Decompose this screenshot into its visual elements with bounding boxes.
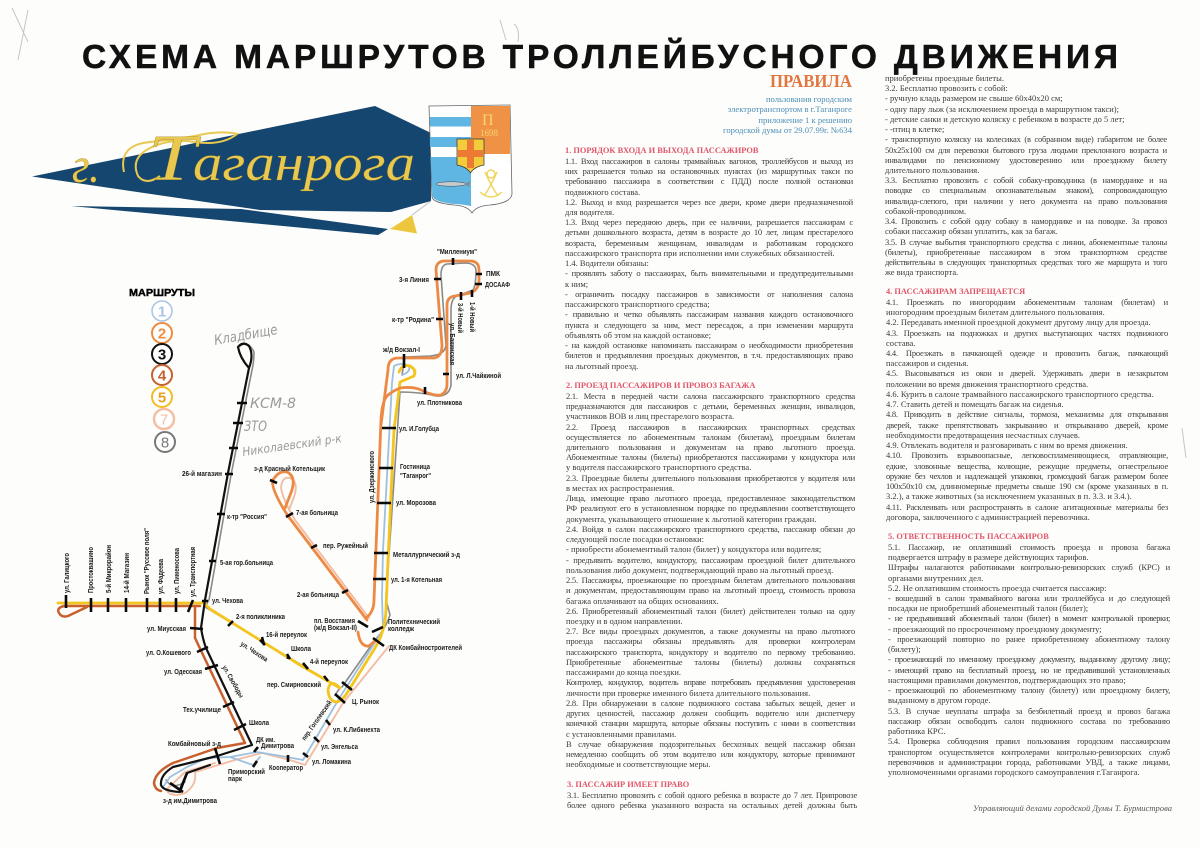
handwritten notes: КСМ-8 — [250, 396, 296, 412]
section 2: passenger travel and baggage: необходимые и соответствующие меры. — [566, 759, 711, 769]
stop labels: Ц. Рынок — [352, 699, 379, 706]
section 5: passenger liability: (билету); — [888, 644, 921, 654]
title: СХЕМА МАРШРУТОВ ТРОЛЛЕЙБУСНОГО ДВИЖЕНИЯ — [82, 37, 1118, 76]
section 4: prohibitions: договора, заключенного с администрацией перевозчика. — [886, 512, 1090, 522]
section 5: passenger liability: 5.2. Не оплатившим стоимость проезда считается пассажир: — [888, 583, 1107, 593]
subtitle: rules source: приложение 1 к решению — [758, 115, 852, 125]
section 5: passenger liability: - проезжающий по просроченному проездному документу; — [888, 624, 1102, 634]
stop labels: ул. Энгельса — [321, 744, 358, 751]
legend: route numbers: 4 — [158, 368, 167, 384]
section 5: passenger liability: работника КРС. — [888, 726, 946, 736]
section 2: passenger travel and baggage: 2.3. Проездные билеты длительного пользования приобретаются у водителя или — [566, 473, 855, 483]
section 3 continued: passenger rights: собакой-проводником. — [885, 206, 966, 216]
stop labels: Тех.училище — [183, 707, 221, 714]
stop labels: ул. Пименосова — [174, 548, 181, 594]
section 3 start: passenger rights — [567, 780, 857, 810]
section 3 continued: passenger rights: собаки пассажир обязан уплатить, как за багаж. — [885, 226, 1058, 236]
stop labels: 1-й Новый — [468, 302, 476, 332]
stop labels: ул. Бакинская — [448, 323, 455, 365]
stop labels: к-тр "Родина" — [392, 317, 434, 324]
section 3 continued: passenger rights: 3.2. Бесплатно провозить с собой: — [885, 83, 1008, 93]
section 2: passenger travel and baggage: и документам, предоставляющим право на льготный проезд, стоимость провоза — [566, 585, 855, 595]
stop labels: ул. Морозова — [396, 500, 436, 507]
section 1: entry and exit: них разрешается только на остановочных пунктах (из маршрутных такси по — [565, 166, 853, 176]
section 2: passenger travel and baggage: документа, указывающего отношение к льготной категории граждан. — [566, 514, 816, 524]
section 2: passenger travel and baggage: Приобретенные абонементные талоны (билеты) должны сохраняться — [566, 657, 855, 667]
section 5: passenger liability: - проезжающий по именному проездному документу, выданному другому лицу; — [888, 654, 1170, 664]
section 2: passenger travel and baggage: 2.5. Пассажиры, проезжающие по проездным билетам длительного пользования — [566, 575, 855, 585]
section 1: entry and exit: - проявлять заботу о пассажирах, быть внимательными и предупредительными — [565, 268, 853, 278]
section 1: entry and exit — [565, 146, 853, 371]
stop labels: Школа — [291, 646, 311, 653]
icon: city coat of arms — [429, 105, 512, 213]
section 1: entry and exit: возраста, беременным женщинам, инвалидам и работникам городского — [565, 238, 853, 248]
section 1: entry and exit: 1.1. Вход пассажиров в салоны трамвайных вагонов, троллейбусов и выход из — [565, 156, 853, 166]
stop labels: ул. Галицкого — [64, 553, 71, 593]
stop labels: Простоквашино — [88, 547, 95, 593]
section 1: entry and exit: 1. ПОРЯДОК ВХОДА И ВЫХОДА ПАССАЖИРОВ — [565, 146, 758, 155]
stop labels: ул. Чехова — [212, 598, 243, 605]
section 2: passenger travel and baggage: 2.2. Проезд пассажиров в пассажирских транспортных средствах — [566, 422, 855, 432]
section 5: passenger liability: 5.1. Пассажир, не оплативший стоимость проезда и провоза багажа — [888, 542, 1170, 552]
section 5: passenger liability: транспортом осуществляется контролерами контрольно-ревизорских служб — [888, 747, 1170, 757]
section 5: passenger liability: Штрафы налагаются работниками контрольно-ревизорских служб (КРС) и — [888, 562, 1170, 572]
stop labels: ДОСААФ — [485, 282, 510, 289]
section 4: prohibitions: 3.2.), а также животных (за исключением указанных в п. 3.3. и 3.4.). — [886, 491, 1132, 501]
section 3 continued: passenger rights — [885, 73, 1167, 277]
section 4: prohibitions: 4.1. Проезжать по иногородним абонементным талонам (билетам) и — [886, 297, 1168, 307]
stop labels: 16-й переулок — [266, 631, 307, 639]
section 2: passenger travel and baggage: поездку и в одном направлении. — [566, 616, 682, 626]
stop labels: ул. Ломакина — [312, 759, 351, 766]
stop labels: Школа — [249, 720, 269, 727]
section 1: entry and exit: - на каждой остановке напоминать пассажирам о необходимости приобретения — [565, 340, 853, 350]
legend: route numbers: 1 — [158, 304, 166, 320]
section 3 continued: passenger rights: - -птиц в клетке; — [885, 124, 944, 134]
subtitle: rules source — [723, 94, 852, 135]
section 4: prohibitions: пассажиров и сиденья. — [886, 358, 968, 368]
section 4: prohibitions: положении во время движения транспортного средства. — [886, 379, 1088, 389]
stop labels: парк — [228, 776, 242, 783]
handwritten notes — [213, 322, 343, 459]
stop labels: пер. Смирновский — [267, 681, 321, 689]
pen marks — [12, 8, 1186, 458]
section 5: passenger liability: 5.3. В случае неуплаты штрафа за безбилетный проезд и провоз багажа — [888, 706, 1170, 716]
banner: city name: Т — [148, 122, 202, 195]
section 2: passenger travel and baggage: проезда пассажиры обязаны предъявлять для проверки контролерам — [566, 636, 855, 646]
section 2: passenger travel and baggage: 2.7. Все виды проездных документов, а также документы на право льготного — [566, 626, 855, 636]
signature: Управляющий делами городской Думы Т. Бурмистрова — [973, 803, 1172, 813]
stop labels: ул. О.Кошевого — [146, 650, 191, 657]
banner: city name — [32, 106, 431, 235]
stop labels: 5-й Микрорайон — [105, 545, 113, 593]
stop labels: Металлургический з-д — [393, 551, 460, 559]
section 2: passenger travel and baggage: Абонементные талоны (билеты) приобретаются пассажирами у кондуктора или — [566, 452, 855, 462]
section 3 continued: passenger rights: действительны в следующих транспортных средствах того же маршрута и того — [885, 257, 1167, 267]
section 3 continued: passenger rights: - транспортную коляску на колесиках (в собранном виде) габаритом не более — [885, 134, 1167, 144]
section 2: passenger travel and baggage: - приобрести абонементный талон (билет) у кондуктора или водителя; — [566, 544, 821, 554]
section 4: prohibitions: 4.7. Ставить детей и помещать багаж на сиденья. — [886, 399, 1064, 409]
section 4: prohibitions: 4.8. Приводить в действие сигналы, тормоза, механизмы для открывания — [886, 409, 1168, 419]
section 3 continued: passenger rights: - детские санки и детскую коляску с ребенком в возрасте до 5 лет; — [885, 114, 1124, 124]
stop labels: "Миллениум" — [437, 249, 477, 256]
route 3 black — [161, 344, 252, 792]
section 3 continued: passenger rights: 3.3. Бесплатно провозить с собой собаку-проводника (в наморднике и на — [885, 175, 1167, 185]
section 3 continued: passenger rights: 3.4. Провозить с собой одну собаку в наморднике и на поводке. За провоз — [885, 216, 1167, 226]
section 5: passenger liability: подвергается штрафу в размере действующих тарифов. — [888, 552, 1088, 562]
stop labels: ул. Транспортная — [190, 547, 197, 597]
section 3 continued: passenger rights: 50х25х100 см для перевозки бытового груза людьми преклонного возраста и — [885, 145, 1167, 155]
stop labels: ж/д Вокзал-I — [382, 347, 420, 354]
section 2: passenger travel and baggage: участников ВОВ и лиц престарелого возраста. — [566, 411, 734, 421]
section 3 start: passenger rights: более одного ребенка указанного возраста на остальных детей должны быть — [567, 800, 857, 810]
stop labels: ул. 1-я Котельная — [391, 577, 442, 584]
section 5: passenger liability: уполномоченными органами городского самоуправления г.Таганрога. — [888, 767, 1140, 777]
banner: city name: г. — [72, 137, 100, 193]
stop labels: Димитрова — [261, 743, 294, 750]
stop labels: (ж/д Вокзал-II) — [314, 625, 357, 632]
route 8 gray — [166, 263, 476, 786]
stop labels: ДК им. — [256, 737, 275, 744]
stop labels: пл. Восстания — [314, 618, 355, 625]
section 3 continued: passenger rights: приобретены проездные билеты. — [885, 73, 1004, 83]
stop labels: ДК Комбайностроителей — [389, 644, 462, 652]
stop labels: ул. Л.Чайкиной — [456, 372, 501, 380]
section 2: passenger travel and baggage: 2.8. При обнаружении в салоне подвижного состава забытых вещей, денег и — [566, 698, 855, 708]
section 4: prohibitions: 4.4. Проезжать в пачкающей одежде и провозить багаж, пачкающий — [886, 348, 1168, 358]
subtitle: rules source: электротранспортом в г.Таганроге — [728, 104, 852, 114]
stop labels: ул. Одесская — [164, 669, 202, 676]
stop labels — [64, 249, 510, 805]
stop labels: ул. Плотникова — [417, 400, 462, 407]
route 7 peach — [166, 478, 389, 795]
section 2: passenger travel and baggage: 2. ПРОЕЗД ПАССАЖИРОВ И ПРОВОЗ БАГАЖА — [566, 381, 755, 390]
route stops — [66, 258, 482, 792]
section 3 start: passenger rights: 3.1. Бесплатно провозить с собой одного ребенка в возрасте до 7 лет. Припровозе — [567, 790, 857, 800]
section 5: passenger liability: - проезжающий по абонементному талону (билету) или проездному билету, — [888, 685, 1170, 695]
section 1: entry and exit: для водителя. — [565, 207, 614, 217]
section 2: passenger travel and baggage: следующей после посадки остановки: — [566, 534, 704, 544]
section 4: prohibitions: необходимости предотвращения несчастных случаев. — [886, 430, 1080, 440]
section 5: passenger liability: выданному в другом городе. — [888, 695, 990, 705]
section 2: passenger travel and baggage: багажа оплачивают на общих основаниях. — [566, 596, 719, 606]
section 5: passenger liability: - проезжающий повторно по ранее приобретенному абонентному талону — [888, 634, 1170, 644]
section 2: passenger travel and baggage: с установленными правилами. — [566, 729, 676, 739]
section 4: prohibitions: едкие, зловонные вещества, колющие, режущие предметы, огнестрельное — [886, 461, 1168, 471]
stop labels: 14-й Магазин — [123, 553, 131, 593]
stop labels: ПМК — [486, 271, 501, 278]
section 4: prohibitions: 4.5. Высовываться из окон и дверей. Удерживать двери в незакрытом — [886, 368, 1168, 378]
section 2: passenger travel and baggage: длительного пользования и документам на право льготного проезда. — [566, 442, 855, 452]
section 2: passenger travel and baggage: Лица, имеющие право льготного проезда, предоставленное законодательством — [566, 493, 855, 503]
stop labels: ул. К.Либкнехта — [333, 726, 380, 734]
section 3 continued: passenger rights: инвалида-слепого, при наличии у него документа на право пользования — [885, 196, 1167, 206]
stop labels: 7-ая больница — [296, 509, 338, 517]
section 2: passenger travel and baggage: предназначаются для пассажиров с детьми, беременных женщин, инвалидов, — [566, 401, 855, 411]
section 5: passenger liability: 5. ОТВЕТСТВЕННОСТЬ ПАССАЖИРОВ — [888, 532, 1049, 541]
section 2: passenger travel and baggage: Контролер, кондуктор, водитель вправе потребовать предъявления удостоверения — [566, 677, 855, 687]
stop labels: колледж — [388, 626, 415, 633]
stop labels: 2-ая больница — [297, 591, 339, 599]
stop labels: з-д им.Димитрова — [163, 798, 217, 805]
handwritten notes: ЗТО — [244, 419, 267, 435]
icon: city coat of arms: 1698 — [480, 128, 498, 138]
section 4: prohibitions: 4. ПАССАЖИРАМ ЗАПРЕЩАЕТСЯ — [886, 287, 1025, 296]
stop labels: ул. Чехова — [239, 641, 269, 664]
section 5: passenger liability: настоящими правилами документов, подтверждающих это право; — [888, 675, 1126, 685]
route 5 yellow — [58, 366, 415, 702]
section 1: entry and exit: 1.3. Вход через переднюю дверь, при ее наличии, разрешается пассажирам с — [565, 217, 853, 227]
section 3 continued: passenger rights: поводке со специальным опознавательным знаком), сопровождающую — [885, 185, 1167, 195]
handwritten notes: Николаевский р-к — [241, 431, 343, 459]
section 3 continued: passenger rights: инвалидами по пенсионному удостоверению или проездному билету — [885, 155, 1167, 165]
section 5: passenger liability: - не предъявивший абонентный талон (билет) в момент контрольной проверки; — [888, 613, 1170, 623]
section 4: prohibitions: 4.2. Передавать именной проездной документ другому лицу для проезда. — [886, 317, 1151, 327]
section 2: passenger travel and baggage: личности при проверке именного билета длительного пользования. — [566, 688, 810, 698]
section 5: passenger liability — [888, 532, 1170, 777]
stop labels: Рынок "Русское поля" — [144, 528, 151, 594]
section 1: entry and exit: - ограничить посадку пассажиров в зависимости от наполнения салона — [565, 289, 853, 299]
stop labels: ул. Фадеева — [158, 559, 165, 594]
stop labels: 26-й магазин — [182, 470, 222, 478]
section 2: passenger travel and baggage: - предъявить водителю, кондуктору, пассажирам проездной билет длительного — [566, 555, 855, 565]
route 1 blue — [163, 364, 409, 787]
section 1: entry and exit: пассажирского транспортного средства; — [565, 299, 710, 309]
subtitle: rules source: пользования городским — [766, 94, 852, 104]
stop labels: ул. И.Голубца — [399, 425, 439, 433]
section 2: passenger travel and baggage: пассажирского транспорта, кондуктору и водителю по первому требованию. — [566, 647, 855, 657]
section 5: passenger liability: 5.4. Проверка соблюдения правил пользования городским пассажирским — [888, 736, 1170, 746]
section 5: passenger liability: - вошедший в салон трамвайного вагона или троллейбуса и до следующей — [888, 593, 1170, 603]
stop labels: к-тр "Россия" — [227, 514, 267, 521]
section 2: passenger travel and baggage: В случае обнаружения подозрительных бесхозных вещей пассажир обязан — [566, 739, 855, 749]
section 3 continued: passenger rights: длительного пользования. — [885, 165, 979, 175]
section 2: passenger travel and baggage: РФ реализуют его в установленном порядке по предъявлении соответствующего — [566, 503, 855, 513]
stop labels: 3-я Линия — [399, 277, 429, 284]
section 4: prohibitions: 4.10. Провозить взрывоопасные, легковоспламеняющиеся, отравляющие, — [886, 450, 1168, 460]
section 5: passenger liability: пассажир обязан освободить салон подвижного состава по требованию — [888, 716, 1170, 726]
stop labels: ул. Миусская — [147, 626, 186, 633]
stop labels: Приморский — [228, 768, 265, 776]
section 3 start: passenger rights: 3. ПАССАЖИР ИМЕЕТ ПРАВО — [567, 780, 689, 789]
icon: city coat of arms: П — [482, 112, 494, 129]
stop labels: Кооператор — [269, 765, 303, 772]
section 3 continued: passenger rights: (билеты), приобретенные пассажиром в этом транспортном средстве — [885, 247, 1167, 257]
section 4: prohibitions — [886, 287, 1168, 522]
stop labels: Политехнический — [388, 618, 440, 626]
section 4: prohibitions: 4.3. Проезжать на подножках и других выступающих частях подвижного — [886, 328, 1168, 338]
section 1: entry and exit: 1.4. Водители обязаны: — [565, 258, 649, 268]
section 1: entry and exit: объявлять об этом на каждой остановке; — [565, 330, 711, 340]
section 4: prohibitions: 4.11. Расклеивать или распространять в салоне агитационные материалы без — [886, 502, 1168, 512]
section 1: entry and exit: - правильно и четко объявлять пассажирам названия каждого остановочного — [565, 309, 853, 319]
legend: route numbers — [152, 301, 175, 452]
section 4: prohibitions: 4.9. Отвлекать водителя и разговаривать с ним во время движения. — [886, 440, 1128, 450]
stop labels: 4-й переулок — [310, 658, 348, 666]
section 1: entry and exit: детьми дошкольного возраста, детям в возрасте до 10 лет, лицам престарелого — [565, 227, 853, 237]
section 2: passenger travel and baggage: в местах их распространения. — [566, 483, 674, 493]
section 2: passenger travel and baggage: пользования либо документ, подтверждающий право на льготный проезд. — [566, 565, 833, 575]
section 1: entry and exit: пункта и следующего за ним, мест пересадок, а при изменении маршрута — [565, 320, 853, 330]
stop labels: ул. Свободы — [220, 664, 245, 699]
section 5: passenger liability: органами внутренних дел. — [888, 573, 983, 583]
section 5: passenger liability: перевозчиков и администрации города, работниками УВД, а также лицами, — [888, 757, 1170, 767]
section 4: prohibitions: состава. — [886, 338, 915, 348]
section 4: prohibitions: 4.6. Курить в салоне трамвайного пассажирского транспортного средства. — [886, 389, 1154, 399]
section 2: passenger travel and baggage: пассажирами до конца поездки. — [566, 667, 681, 677]
section 3 continued: passenger rights: 3.5. В случае выбытия транспортного средства с линии, абонементные талоны — [885, 237, 1167, 247]
section 2: passenger travel and baggage: у водителя пассажирского транспортного средства. — [566, 462, 751, 472]
section 3 continued: passenger rights: же вида транспорта. — [885, 267, 958, 277]
section 1: entry and exit: подвижного состава. — [565, 187, 640, 197]
section 1: entry and exit: к ним; — [565, 279, 588, 289]
section 4: prohibitions: иногородним проездным билетам длительного пользования. — [886, 307, 1105, 317]
legend: route numbers: 7 — [160, 412, 168, 428]
section 1: entry and exit: 1.2. Выход и вход разрешается через все двери, кроме двери предназначенной — [565, 197, 853, 207]
heading: routes legend: МАРШРУТЫ — [129, 288, 195, 299]
heading: rules: ПРАВИЛА — [770, 71, 852, 91]
legend: route numbers: 3 — [158, 346, 166, 364]
stop labels: 2-я поликлиника — [236, 614, 285, 621]
section 5: passenger liability: - имеющий право на бесплатный проезд, но не предъявивший установленных — [888, 665, 1170, 675]
legend: route numbers: 8 — [161, 434, 169, 452]
section 2: passenger travel and baggage: 2.4. Войдя в салон пассажирского транспортного средства, пассажир обязан до — [566, 524, 855, 534]
route 2 orange — [273, 261, 479, 646]
section 4: prohibitions: 100х50х10 см, длинномерные предметы свыше 190 см (кроме указанных в п. — [886, 481, 1168, 491]
stop labels: 5-ая гор.больница — [220, 559, 273, 567]
section 3 continued: passenger rights: - одну пару лыж (за исключением проезда в маршрутном такси); — [885, 104, 1119, 114]
route map lines — [58, 261, 479, 795]
stop labels: пер. Ружейный — [323, 542, 368, 550]
legend: route numbers: 2 — [158, 326, 166, 342]
section 1: entry and exit: билетов и предъявления проездных документов, в т.ч. предоставляющих право — [565, 350, 853, 360]
stop labels: "Таганрог" — [400, 473, 431, 480]
section 2: passenger travel and baggage: конечной станции маршрута, которые обязаны поступить с ними в соответствии — [566, 718, 855, 728]
section 5: passenger liability: посадки не приобретший абонементный талон (билет); — [888, 603, 1088, 613]
section 2: passenger travel and baggage — [566, 381, 855, 769]
section 2: passenger travel and baggage: 2.1. Места в передней части салона пассажирского транспортного средства — [566, 391, 855, 401]
section 2: passenger travel and baggage: 2.6. Приобретенный абонементный талон (билет) действителен только на одну — [566, 606, 855, 616]
stop labels: ул. Дзержинского — [369, 451, 376, 503]
stop labels: з-д Красный Котельщик — [254, 465, 325, 473]
section 2: passenger travel and baggage: немедленно сообщить об этом водителю или кондуктору, которые принимают — [566, 749, 855, 759]
section 1: entry and exit: пассажирского транспорта при исполнении ими служебных обязанностей. — [565, 248, 835, 258]
stop labels: Гостиница — [400, 464, 430, 471]
section 1: entry and exit: на льготный проезд. — [565, 361, 638, 371]
section 2: passenger travel and baggage: других ценностей, пассажир должен сообщить водителю или диспетчеру — [566, 708, 855, 718]
section 1: entry and exit: требованию пассажира в соответствии с ПДД) после полной остановки — [565, 176, 853, 186]
stop labels: пер. Гоголевский — [300, 699, 334, 742]
stop labels: 3-й Новый — [456, 303, 464, 333]
section 4: prohibitions: дверей, также препятствовать закрыванию и открыванию дверей, кроме — [886, 420, 1168, 430]
stop labels: Комбайновый з-д — [168, 740, 221, 748]
banner: city name: аганрога — [193, 135, 415, 192]
section 2: passenger travel and baggage: осуществляется по абонементным талонам (билетам), проездным билетам — [566, 432, 855, 442]
section 3 continued: passenger rights: - ручную кладь размером не свыше 60х40х20 см; — [885, 93, 1063, 103]
section 4: prohibitions: оружие без чехлов и надлежащей упаковки, громоздкий багаж размером более — [886, 471, 1168, 481]
legend: route numbers: 5 — [158, 390, 166, 406]
handwritten notes: Кладбище — [213, 322, 279, 349]
subtitle: rules source: городской думы от 29.07.99г. №634 — [723, 125, 852, 135]
route 4 dark orange — [58, 606, 245, 791]
